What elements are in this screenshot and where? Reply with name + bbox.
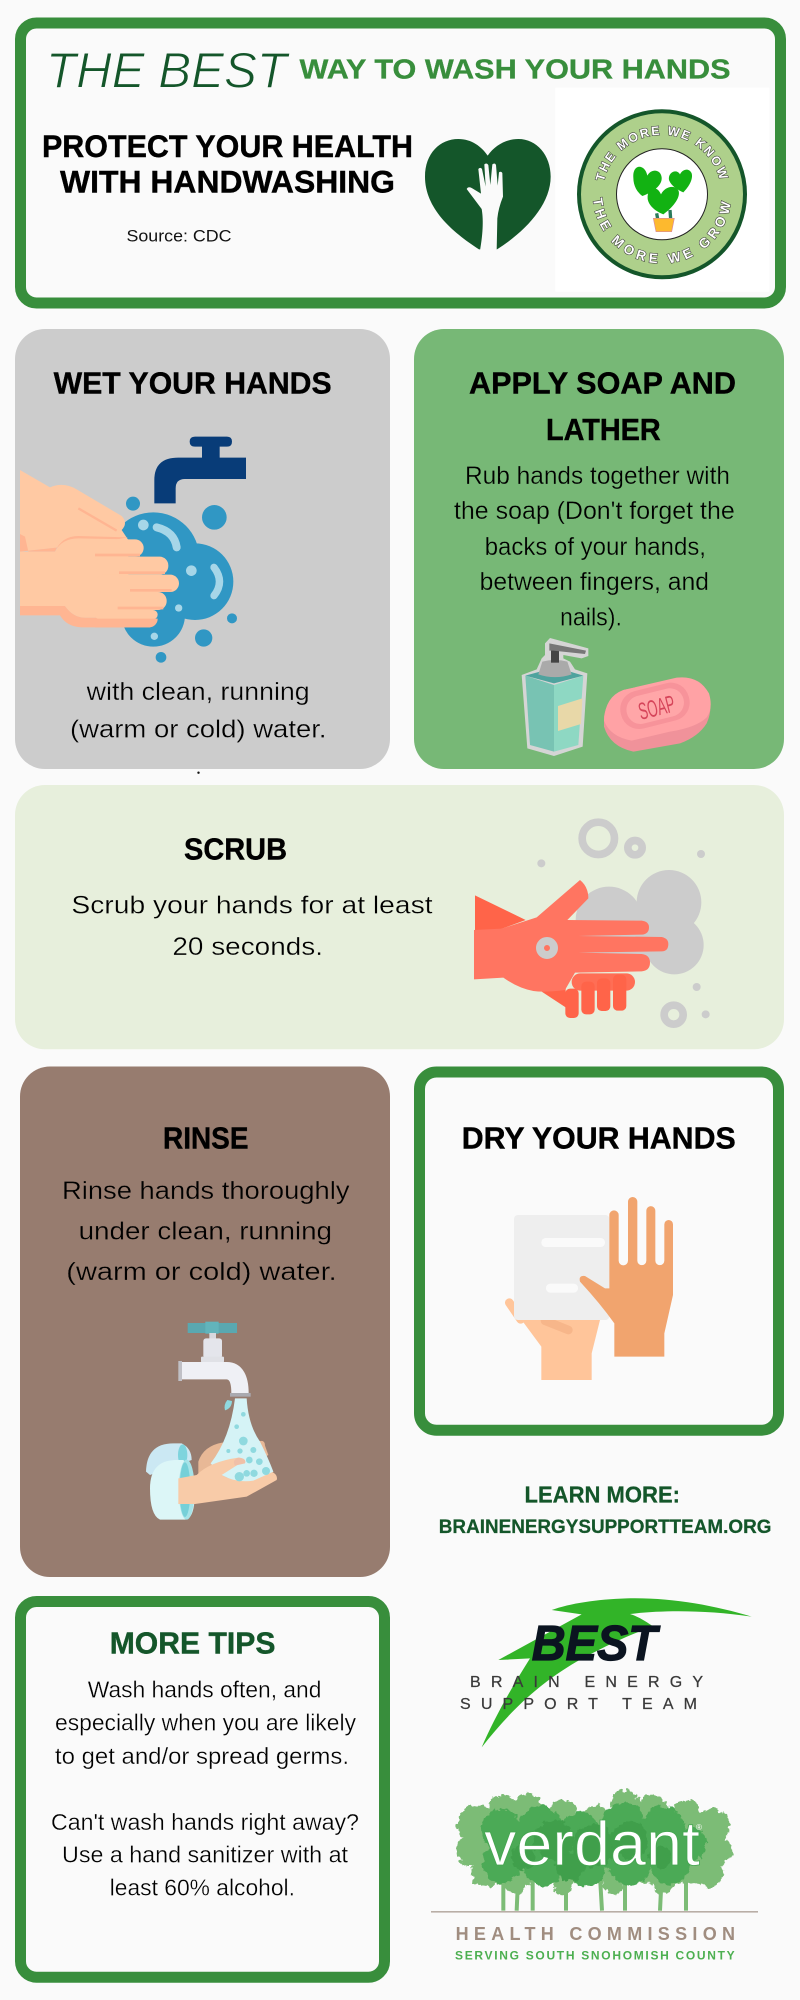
- panel: dry your hands: [420, 1072, 778, 1430]
- body text: wet: with clean, running: [86, 678, 310, 706]
- body text: tips: especially when you are likely: [55, 1710, 356, 1736]
- heading: more tips: MORE TIPS: [110, 1625, 276, 1660]
- icon: soap dispenser: [522, 638, 588, 756]
- icon: green lightning bolt: [482, 1598, 752, 1747]
- logo: verdant health commission: SERVING SOUTH SNOHOMISH COUNTY: [455, 1948, 735, 1962]
- body text: lather: between fingers, and: [480, 568, 709, 596]
- body text: tips: Can't wash hands right away?: [51, 1809, 359, 1835]
- body text: wet: [70, 678, 326, 744]
- heading: scrub: SCRUB: [184, 831, 287, 866]
- heading: apply soap and lather: LATHER: [546, 412, 661, 447]
- body text: tips: to get and/or spread germs.: [55, 1743, 349, 1769]
- body text: scrub: Scrub your hands for at least: [71, 891, 433, 919]
- icon: scrubbing hands: [474, 822, 710, 1024]
- panel: scrub: [15, 785, 784, 1049]
- body text: tips: Use a hand sanitizer with at: [62, 1842, 349, 1868]
- heading: apply soap and lather: APPLY SOAP AND: [469, 365, 736, 400]
- body text: tips: Wash hands often, and: [88, 1677, 321, 1703]
- icon: tree line: [457, 1790, 732, 1911]
- title: way to wash your hands: WAY TO WASH YOUR HANDS: [300, 54, 730, 85]
- heading: wet your hands: WET YOUR HANDS: [54, 365, 332, 400]
- panel: more tips: [20, 1602, 384, 1977]
- logo: brain energy support team: BRAIN ENERGY: [470, 1674, 703, 1691]
- body text: rinse: under clean, running: [79, 1217, 332, 1245]
- body text: rinse: (warm or cold) water.: [66, 1258, 337, 1286]
- panel: apply soap and lather: [414, 329, 784, 769]
- subtitle: protect your health: WITH HANDWASHING: [60, 163, 395, 199]
- body text: tips: [51, 1677, 359, 1901]
- logo: brain energy support team: BEST: [532, 1617, 661, 1671]
- heading: rinse: RINSE: [163, 1120, 248, 1156]
- logo: the more we know badge: [577, 109, 747, 280]
- icon: heart with hand: [425, 139, 551, 251]
- learn more link: BRAINENERGYSUPPORTTEAM.ORG: [439, 1517, 771, 1538]
- body text: lather: backs of your hands,: [485, 533, 706, 561]
- panel: wet your hands: [15, 329, 390, 769]
- heading: dry your hands: DRY YOUR HANDS: [462, 1120, 736, 1156]
- icon: hands under tap: [20, 437, 246, 663]
- body text: scrub: 20 seconds.: [172, 933, 323, 961]
- stray dot: [197, 772, 200, 774]
- icon: soap bar: SOAP: [636, 691, 678, 726]
- subtitle: protect your health: PROTECT YOUR HEALTH: [42, 128, 413, 164]
- body text: scrub: [71, 891, 433, 961]
- panel: header: [15, 18, 786, 308]
- icon: towel and hands: [509, 1197, 673, 1380]
- body text: tips: least 60% alcohol.: [110, 1875, 295, 1901]
- heading: apply soap and lather: [469, 365, 736, 447]
- logo: verdant health commission: verdant: [484, 1810, 700, 1879]
- body text: wet: (warm or cold) water.: [70, 716, 326, 744]
- body text: rinse: [62, 1177, 350, 1286]
- logo: verdant health commission: [431, 1790, 758, 1962]
- body text: lather: nails).: [560, 604, 622, 632]
- body text: lather: Rub hands together with: [465, 462, 730, 490]
- logo: the more we know badge: THE MORE WE KNOW: [594, 126, 729, 180]
- source note: Source: CDC: [126, 227, 232, 246]
- logo: verdant health commission: HEALTH COMMISSION: [456, 1924, 735, 1944]
- logo: brain energy support team: SUPPORT TEAM: [460, 1696, 697, 1713]
- title: the best: THE BEST: [46, 42, 290, 98]
- icon: soap bar: [604, 677, 711, 752]
- icon: tap rinsing hand: [146, 1322, 277, 1520]
- logo: brain energy support team: [460, 1598, 752, 1747]
- icon: potted plant: [633, 167, 692, 232]
- learn more link: [439, 1482, 771, 1538]
- logo: verdant health commission: ®: [696, 1823, 702, 1832]
- logo: the more we know badge: THE MORE WE GROW: [592, 196, 731, 264]
- learn more link: LEARN MORE:: [524, 1482, 680, 1508]
- body text: lather: the soap (Don't forget the: [454, 497, 735, 525]
- body text: lather: [454, 462, 735, 632]
- panel: rinse: [20, 1066, 390, 1577]
- body text: rinse: Rinse hands thoroughly: [62, 1177, 350, 1205]
- subtitle: protect your health: [42, 128, 413, 199]
